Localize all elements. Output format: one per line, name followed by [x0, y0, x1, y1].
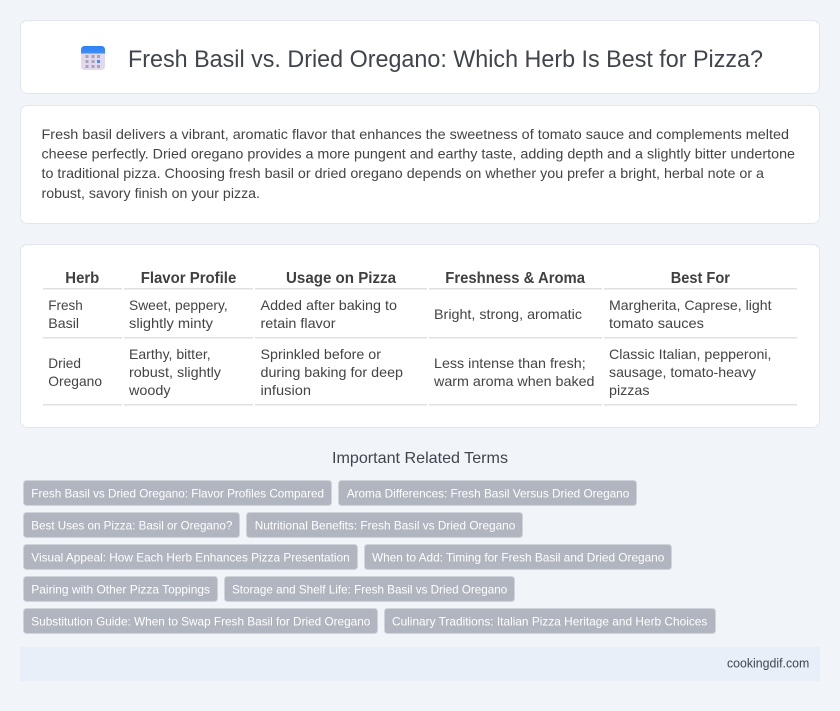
tag: Aroma Differences: Fresh Basil Versus Dried Oregano [347, 486, 630, 500]
table row: dried oregano: Sprinkled before or [260, 346, 381, 362]
footer: cookingdif.com [727, 656, 809, 671]
tag [224, 576, 514, 602]
text block: introduction paragraph: Fresh basil delivers a vibrant, aromatic flavor that enhances the sweetness of tomato sauce and complements melted [42, 126, 789, 142]
text block: introduction paragraph [42, 126, 795, 201]
table row: dried oregano [43, 346, 797, 406]
table row: fresh basil: Sweet, peppery, [129, 297, 228, 313]
tag [24, 480, 332, 506]
panel: title header [20, 20, 820, 94]
table row: dried oregano: woody [128, 382, 170, 398]
tag [338, 480, 636, 506]
tag [24, 512, 240, 538]
tag: Pairing with Other Pizza Toppings [31, 582, 210, 596]
icon: calendar [81, 46, 105, 70]
table row: fresh basil: Margherita, Caprese, light [609, 297, 772, 313]
panel: introduction [20, 106, 820, 224]
tag: Culinary Traditions: Italian Pizza Heritage and Herb Choices [392, 614, 707, 628]
tag [364, 544, 672, 570]
text block: introduction paragraph: robust, savory finish on your pizza. [42, 185, 260, 201]
text block: introduction paragraph: to traditional pizza. Choosing fresh basil or dried oregano depends on whether you prefer a bright, herbal note or a [42, 165, 764, 181]
table header row: Best For [671, 270, 730, 287]
panel: related term tags [24, 480, 716, 634]
table row: fresh basil: Basil [48, 315, 79, 331]
table row: fresh basil: tomato sauces [609, 315, 704, 331]
table row: dried oregano: warm aroma when baked [433, 373, 594, 389]
table row: fresh basil: slightly minty [129, 315, 213, 331]
tag [24, 576, 218, 602]
table row: fresh basil: Fresh [48, 297, 83, 313]
tag: Substitution Guide: When to Swap Fresh Basil for Dried Oregano [31, 614, 371, 628]
table row: fresh basil: Added after baking to [260, 297, 397, 313]
tag [246, 512, 522, 538]
table row: dried oregano: during baking for deep [260, 364, 403, 380]
table row: dried oregano: Oregano [48, 373, 102, 389]
table header row: Freshness & Aroma [445, 270, 585, 287]
panel: comparison table [20, 244, 820, 428]
heading: important related terms: Important Related Terms [332, 450, 508, 467]
table row: dried oregano: infusion [260, 382, 311, 398]
tag: Nutritional Benefits: Fresh Basil vs Dried Oregano [255, 518, 516, 532]
table header row: Flavor Profile [141, 270, 236, 287]
table row: dried oregano: Less intense than fresh; [434, 355, 586, 371]
table row: fresh basil: retain flavor [260, 315, 336, 331]
tag [24, 544, 358, 570]
tag: Visual Appeal: How Each Herb Enhances Pizza Presentation [31, 550, 350, 564]
table row: dried oregano: Earthy, bitter, [129, 346, 211, 362]
tag: Best Uses on Pizza: Basil or Oregano? [31, 518, 233, 532]
tag [384, 608, 716, 634]
tag: Storage and Shelf Life: Fresh Basil vs Dried Oregano [232, 582, 508, 596]
table row: fresh basil [43, 297, 797, 338]
table header row [43, 270, 797, 290]
tag [24, 608, 378, 634]
table header row: Herb [65, 270, 100, 287]
table header row: Usage on Pizza [286, 270, 396, 287]
table row: dried oregano: robust, slightly [129, 364, 221, 380]
table row: dried oregano: Classic Italian, pepperoni, [609, 346, 772, 362]
tag: Fresh Basil vs Dried Oregano: Flavor Profiles Compared [31, 486, 324, 500]
table row: dried oregano: Dried [48, 355, 81, 371]
table row: fresh basil: Bright, strong, aromatic [434, 306, 582, 322]
table row: dried oregano: sausage, tomato-heavy [609, 364, 756, 380]
footer [20, 647, 820, 681]
table row: dried oregano: pizzas [609, 382, 650, 398]
text block: introduction paragraph: cheese perfectly. Dried oregano provides a more pungent and earthy taste, adding depth and a slightly bitter undertone [42, 146, 795, 162]
tag: When to Add: Timing for Fresh Basil and Dried Oregano [372, 550, 665, 564]
title: Fresh Basil vs. Dried Oregano: Which Herb Is Best for Pizza? [128, 46, 763, 73]
